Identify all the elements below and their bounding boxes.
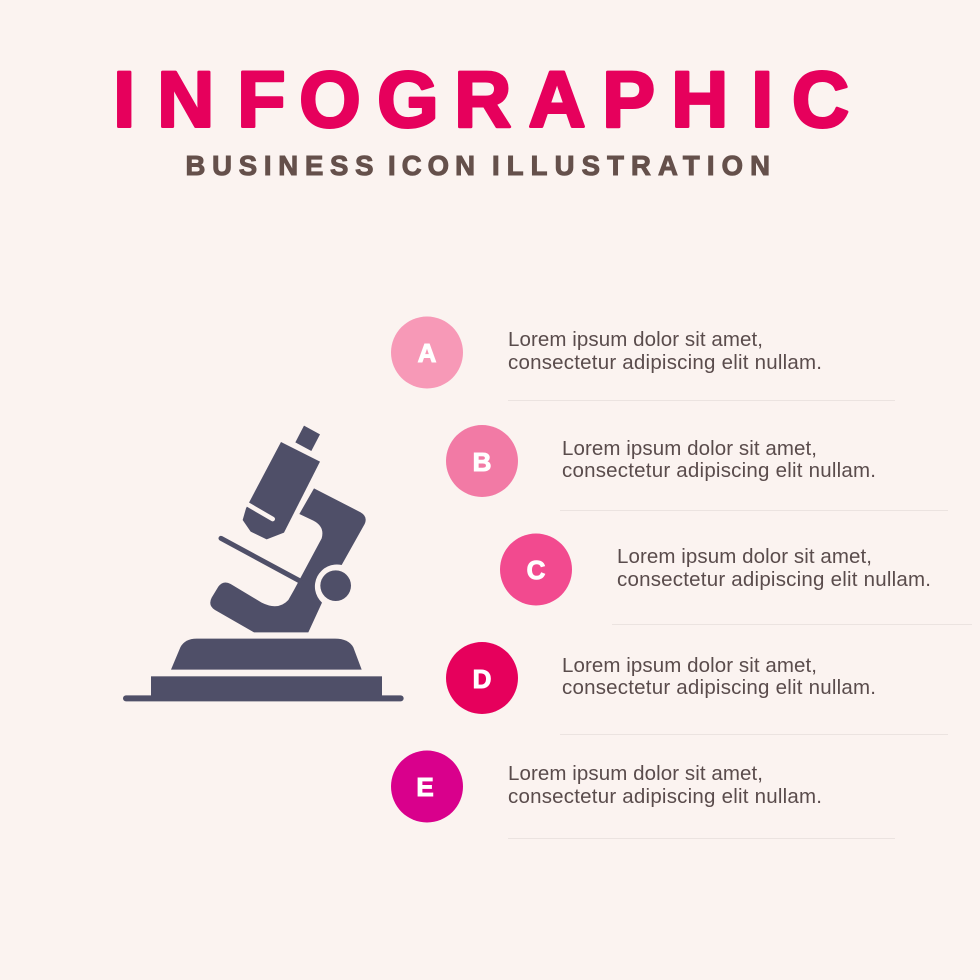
subtitle: ILLUSTRATION	[492, 150, 770, 181]
step A	[391, 316, 895, 401]
step D	[446, 642, 948, 735]
microscope arm	[210, 488, 366, 632]
step B: Lorem ipsum dolor sit amet,	[562, 437, 817, 460]
step B: B	[473, 447, 491, 477]
microscope stage	[221, 538, 300, 581]
step D: consectetur adipiscing elit nullam.	[562, 676, 876, 699]
microscope eyepiece	[295, 426, 320, 451]
step D: Lorem ipsum dolor sit amet,	[562, 654, 817, 677]
subtitle: ICON	[388, 150, 475, 181]
step C: consectetur adipiscing elit nullam.	[617, 568, 931, 591]
step D: D	[473, 664, 491, 694]
step E	[391, 750, 895, 839]
microscope knob	[320, 570, 351, 601]
subtitle: BUSINESS	[186, 150, 374, 181]
step C: Lorem ipsum dolor sit amet,	[617, 545, 872, 568]
step C: C	[527, 555, 546, 585]
microscope tube	[243, 442, 320, 539]
icon: microscope	[123, 426, 404, 701]
step A: A	[418, 338, 437, 368]
step A: consectetur adipiscing elit nullam.	[508, 351, 822, 374]
microscope dome base	[171, 639, 362, 670]
title: INFOGRAPHIC	[113, 54, 849, 144]
step E: E	[416, 772, 434, 802]
microscope plate	[151, 676, 382, 698]
step C	[500, 534, 972, 625]
step E: consectetur adipiscing elit nullam.	[508, 785, 822, 808]
step B: consectetur adipiscing elit nullam.	[562, 459, 876, 482]
microscope ground line	[123, 695, 404, 701]
subtitle	[186, 150, 770, 181]
step A: Lorem ipsum dolor sit amet,	[508, 328, 763, 351]
step B	[446, 425, 948, 511]
step E: Lorem ipsum dolor sit amet,	[508, 762, 763, 785]
